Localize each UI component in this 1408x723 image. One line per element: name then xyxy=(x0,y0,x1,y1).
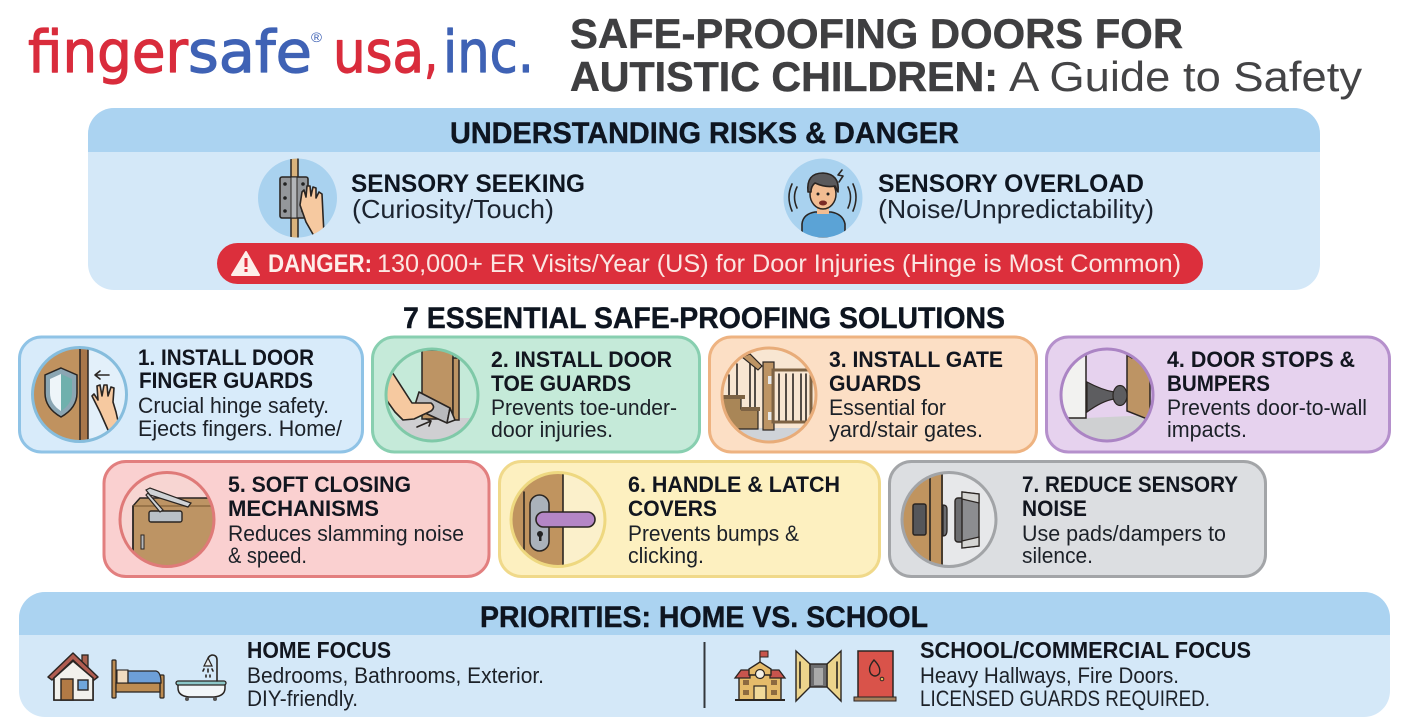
text: card 2: door injuries. xyxy=(491,417,613,442)
panel: understanding risks and danger xyxy=(88,108,1320,290)
text: card 4: impacts. xyxy=(1167,417,1247,442)
icon: stair gate xyxy=(722,348,816,443)
text: card 3 xyxy=(829,347,1003,442)
card 4: door stops and bumpers xyxy=(1046,337,1390,452)
text: card 1: Ejects fingers. Home/ xyxy=(138,416,343,441)
text: sensory overload: SENSORY OVERLOAD xyxy=(878,170,1144,198)
text: card 6: Prevents bumps & xyxy=(628,521,799,546)
text: card 6: COVERS xyxy=(628,496,717,521)
title: A Guide to Safety xyxy=(1009,53,1362,100)
card 7: reduce sensory noise xyxy=(890,462,1266,576)
text: school focus: SCHOOL/COMMERCIAL FOCUS xyxy=(920,637,1251,663)
card 2: toe guards xyxy=(372,337,700,452)
icon: hallway xyxy=(796,651,841,701)
logo: fingersafe usa, inc. xyxy=(28,18,534,86)
icon: foot and toe guard xyxy=(385,348,480,442)
logo: fingersafe usa, inc.: inc. xyxy=(443,18,534,86)
icon: warning triangle xyxy=(232,252,259,275)
text: card 5: MECHANISMS xyxy=(228,496,379,521)
heading: understanding risks and danger: UNDERSTANDING RISKS & DANGER xyxy=(450,117,959,150)
icon: bed xyxy=(112,660,164,698)
card 3: gate guards xyxy=(710,337,1036,452)
text: home focus: Bedrooms, Bathrooms, Exterior. xyxy=(247,663,544,688)
text: home focus xyxy=(247,637,544,711)
icon: house xyxy=(48,653,98,700)
icon: bathtub xyxy=(176,655,226,701)
callout: danger statistic xyxy=(217,243,1203,284)
logo: fingersafe usa, inc.: ® xyxy=(311,29,323,45)
title: SAFE-PROOFING DOORS FOR xyxy=(570,10,1183,57)
card 5: soft closing mechanisms xyxy=(104,462,489,576)
logo: fingersafe usa, inc.: finger xyxy=(28,18,188,86)
logo: fingersafe usa, inc.: , xyxy=(424,18,438,86)
text: card 4: 4. DOOR STOPS & xyxy=(1167,347,1355,372)
text: school focus: Heavy Hallways, Fire Doors. xyxy=(920,663,1179,688)
text: card 4: BUMPERS xyxy=(1167,371,1270,396)
text: sensory seeking: (Curiosity/Touch) xyxy=(352,194,554,224)
panel: priorities home vs school xyxy=(19,592,1390,717)
text: home focus: HOME FOCUS xyxy=(247,637,391,663)
text: card 3: yard/stair gates. xyxy=(829,417,983,442)
text: card 7: 7. REDUCE SENSORY xyxy=(1022,472,1238,497)
text: card 5: 5. SOFT CLOSING xyxy=(228,472,411,497)
text: sensory overload: (Noise/Unpredictability) xyxy=(878,194,1154,224)
icon: padded door handle xyxy=(511,472,605,566)
heading: priorities: PRIORITIES: HOME VS. SCHOOL xyxy=(480,601,928,634)
text: card 1: FINGER GUARDS xyxy=(139,368,313,393)
heading: 7 essential solutions: 7 ESSENTIAL SAFE-PROOFING SOLUTIONS xyxy=(403,302,1005,335)
icon: hand near hinge xyxy=(258,155,337,241)
text: card 1 xyxy=(138,345,343,441)
text: card 1: Crucial hinge safety. xyxy=(138,393,329,418)
text: card 4: Prevents door-to-wall xyxy=(1167,395,1367,420)
icon: door stop xyxy=(1060,348,1154,443)
icon: door closer xyxy=(120,472,214,570)
text: card 6: 6. HANDLE & LATCH xyxy=(628,472,840,497)
title xyxy=(570,10,1362,100)
text: card 3: GUARDS xyxy=(829,371,921,396)
card 6: handle and latch covers xyxy=(500,462,880,576)
text: sensory seeking xyxy=(351,170,585,224)
text: card 4 xyxy=(1167,347,1367,442)
logo: fingersafe usa, inc.: usa xyxy=(333,18,424,86)
callout: danger statistic: 130,000+ ER Visits/Year (US) for Door Injuries (Hinge is Most Common) xyxy=(377,250,1181,278)
icon: door dampers xyxy=(902,472,996,566)
text: card 7 xyxy=(1022,472,1238,568)
icon: shield and hand xyxy=(30,345,130,445)
callout: danger statistic: DANGER: xyxy=(268,250,372,278)
text: card 1: 1. INSTALL DOOR xyxy=(138,345,314,370)
text: card 5: & speed. xyxy=(228,543,307,568)
title: AUTISTIC CHILDREN: xyxy=(570,53,998,100)
text: sensory overload xyxy=(878,170,1154,224)
text: card 2 xyxy=(491,347,677,442)
text: home focus: DIY-friendly. xyxy=(247,686,358,711)
text: card 3: Essential for xyxy=(829,395,946,420)
text: card 2: 2. INSTALL DOOR xyxy=(491,347,672,372)
text: card 3: 3. INSTALL GATE xyxy=(829,347,1003,372)
logo: fingersafe usa, inc.: safe xyxy=(188,18,312,86)
text: card 7: silence. xyxy=(1022,543,1093,568)
icon: overwhelmed child xyxy=(784,158,862,238)
card 1: finger guards xyxy=(20,337,362,452)
text: school focus xyxy=(920,637,1251,711)
icon: school building xyxy=(735,651,785,701)
text: card 5 xyxy=(228,472,464,568)
text: card 2: TOE GUARDS xyxy=(491,371,631,396)
text: card 7: Use pads/dampers to xyxy=(1022,521,1226,546)
text: card 7: NOISE xyxy=(1022,496,1087,521)
text: school focus: LICENSED GUARDS REQUIRED. xyxy=(920,686,1210,711)
text: card 6: clicking. xyxy=(628,543,704,568)
text: card 2: Prevents toe-under- xyxy=(491,395,677,420)
text: card 6 xyxy=(628,472,840,568)
text: card 5: Reduces slamming noise xyxy=(228,521,464,546)
icon: fire door xyxy=(854,651,896,701)
text: sensory seeking: SENSORY SEEKING xyxy=(351,170,585,198)
